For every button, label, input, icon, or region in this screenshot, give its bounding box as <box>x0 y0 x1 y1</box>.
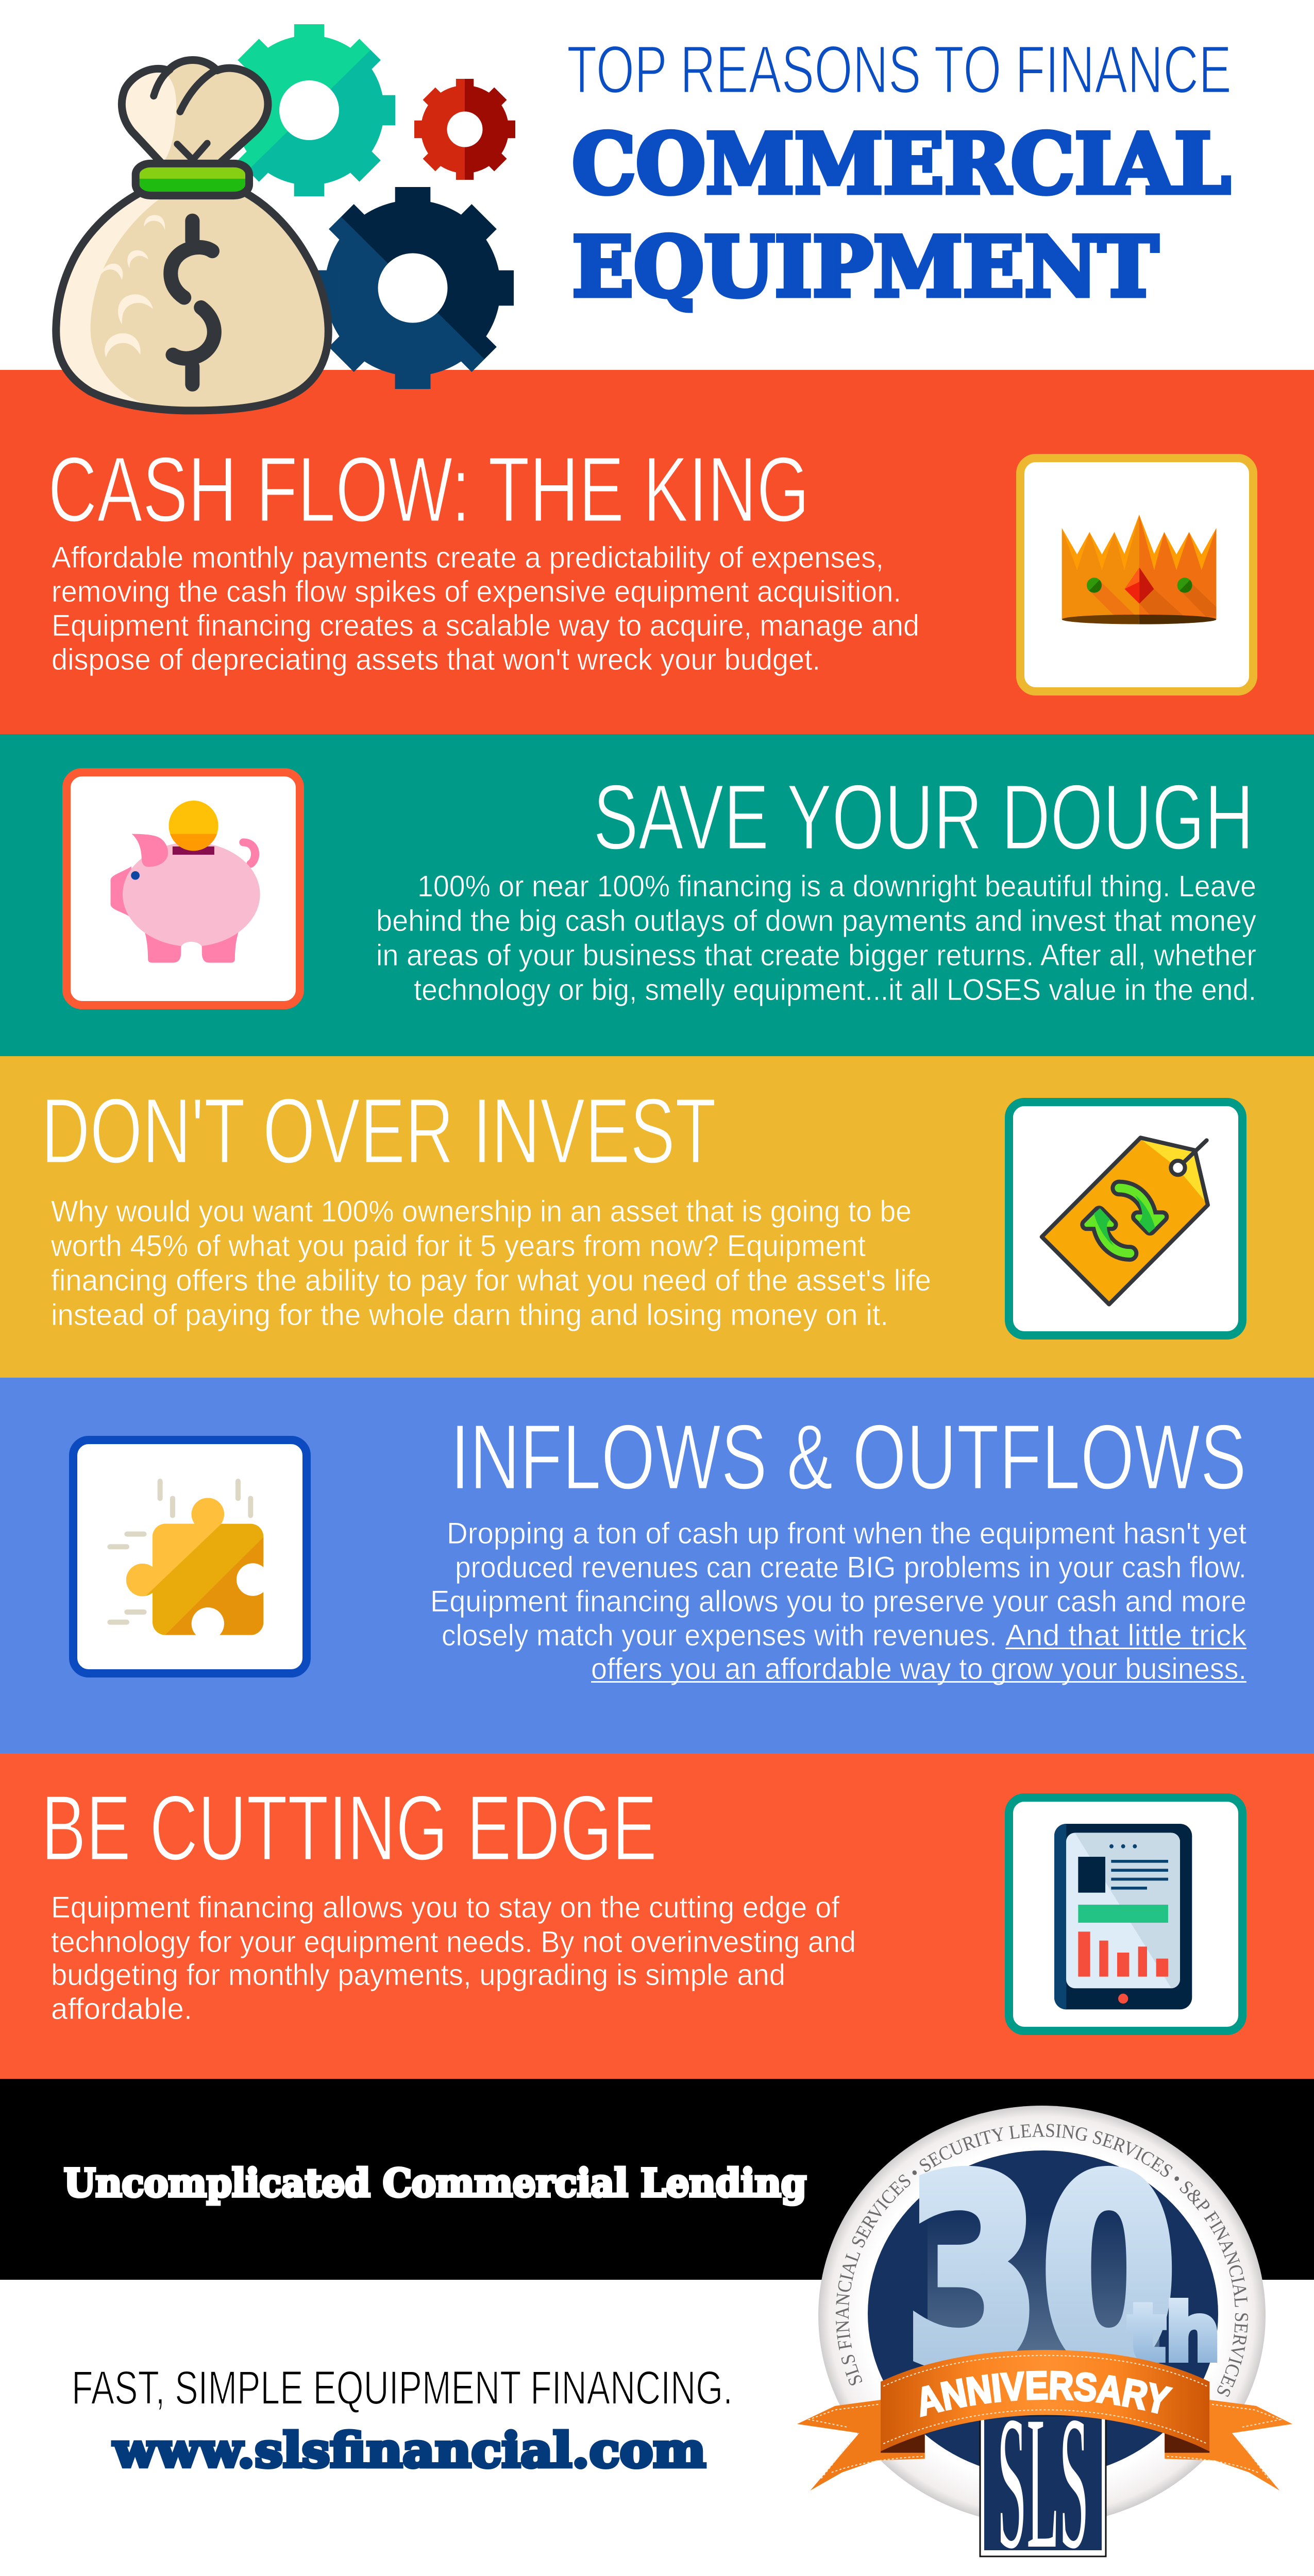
badge big 30: 30 <box>904 2124 1177 2424</box>
text block: inflows and outflows: Dropping a ton of cash up front when the equipment hasn't yet <box>447 1517 1246 1550</box>
badge navy disc <box>868 2150 1218 2477</box>
panel: be cutting edge band <box>0 1753 1314 2079</box>
text block: be cutting edge: affordable. <box>51 1992 192 2026</box>
badge: 30th anniversary <box>797 2106 1292 2576</box>
text block: cash flow: Affordable monthly payments create a predictability of expenses, <box>52 541 884 574</box>
icon: teal gear <box>223 24 395 196</box>
badge ribbon <box>797 2350 1292 2490</box>
text block: don't over invest: Why would you want 100% ownership in an asset that is going to be <box>51 1195 912 1228</box>
title: commercial: COMMERCIAL <box>572 115 1231 212</box>
text block: don't over invest <box>50 1195 931 1332</box>
website url: www.slsfinancial.com <box>113 2422 706 2478</box>
text block: save your dough: behind the big cash outlays of down payments and invest that money <box>376 904 1256 938</box>
icon: piggy bank card <box>66 772 300 1005</box>
text block: inflows and outflows: Equipment financing allows you to preserve your cash and more <box>430 1585 1246 1618</box>
text block: be cutting edge <box>51 1891 856 2026</box>
text block: be cutting edge: Equipment financing allows you to stay on the cutting edge of <box>51 1891 840 1924</box>
text block: inflows and outflows: offers you an affordable way to grow your business. <box>591 1652 1246 1686</box>
title: equipment: EQUIPMENT <box>572 218 1158 315</box>
text block: save your dough: 100% or near 100% financing is a downright beautiful thing. Leave <box>417 870 1256 903</box>
text block: don't over invest: financing offers the ability to pay for what you need of the asset's life <box>51 1264 931 1297</box>
badge numeral backing <box>928 2215 1159 2370</box>
text block: cash flow: removing the cash flow spikes of expensive equipment acquisition. <box>52 575 901 608</box>
text block: don't over invest: worth 45% of what you paid for it 5 years from now? Equipment <box>50 1229 866 1263</box>
icon: crown card <box>1020 458 1253 691</box>
badge SLS plate <box>980 2377 1106 2576</box>
icon: red gear <box>414 79 515 180</box>
text block: fast simple financing: FAST, SIMPLE EQUIPMENT FINANCING. <box>72 2362 733 2414</box>
text block: be cutting edge: technology for your equipment needs. By not overinvesting and <box>51 1925 856 1959</box>
text block: don't over invest: instead of paying for the whole darn thing and losing money on it. <box>51 1298 888 1332</box>
panel: don't over invest band <box>0 1056 1314 1378</box>
text block: inflows and outflows: produced revenues can create BIG problems in your cash flow. <box>455 1551 1246 1584</box>
icon: money bag <box>56 60 328 411</box>
panel: black tagline band <box>0 2079 1314 2280</box>
icon: navy gear <box>312 187 514 389</box>
text block: cash flow: Equipment financing creates a scalable way to acquire, manage and <box>52 609 919 642</box>
tagline: Uncomplicated Commercial Lending <box>64 2161 806 2206</box>
panel: inflows and outflows band <box>0 1378 1314 1753</box>
heading: be cutting edge: BE CUTTING EDGE <box>41 1776 657 1880</box>
text block: cash flow: dispose of depreciating assets that won't wreck your budget. <box>52 643 820 676</box>
panel: save your dough band <box>0 734 1314 1056</box>
icon: price tag card <box>1009 1102 1242 1335</box>
badge anniversary text: ANNIVERSARY <box>920 2371 1173 2417</box>
text block: save your dough: in areas of your business that create bigger returns. After all, whether <box>376 939 1256 972</box>
heading: cash flow: CASH FLOW: THE KING <box>48 438 810 541</box>
badge th: th <box>1128 2289 1220 2378</box>
icon: puzzle card <box>73 1440 307 1673</box>
text block: inflows and outflows <box>430 1517 1247 1686</box>
badge ring <box>818 2106 1266 2525</box>
badge ring text: SLS FINANCIAL SERVICES • SECURITY LEASING SERVICES • S&P FINANCIAL SERVICES <box>836 2124 1248 2397</box>
heading: don't over invest: DON'T OVER INVEST <box>41 1079 716 1183</box>
text block: inflows and outflows: closely match your expenses with revenues. <box>442 1619 997 1652</box>
text block: cash flow <box>52 541 919 676</box>
icon: tablet card <box>1009 1798 1242 2031</box>
panel: cash flow band <box>0 370 1314 734</box>
text block: save your dough <box>376 870 1256 1007</box>
text block: inflows and outflows: And that little trick <box>1005 1619 1247 1652</box>
text block: be cutting edge: budgeting for monthly payments, upgrading is simple and <box>51 1958 785 1992</box>
text block: save your dough: technology or big, smelly equipment...it all LOSES value in the end. <box>414 973 1256 1007</box>
